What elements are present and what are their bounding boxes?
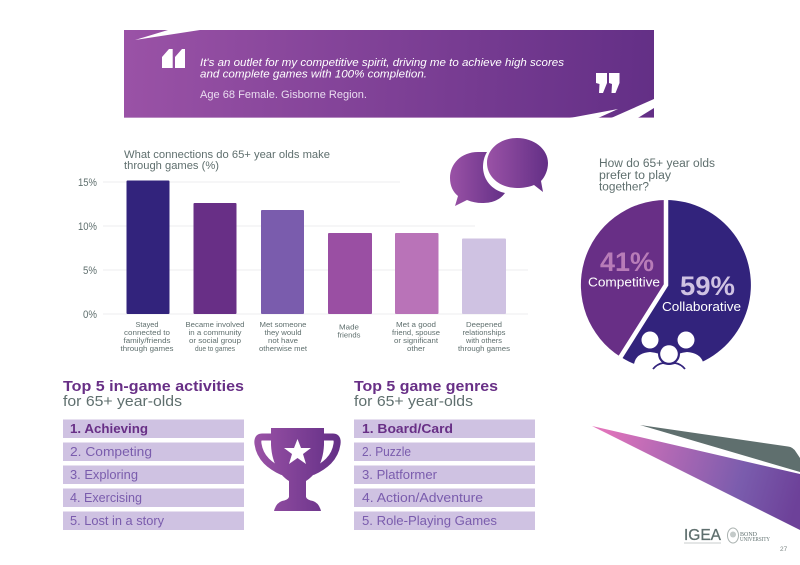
icon: closing quotation mark	[596, 73, 620, 93]
category labels: or social group	[189, 336, 241, 345]
category labels: not have	[268, 336, 298, 345]
category labels: through games	[120, 344, 174, 353]
list: in-game activities	[63, 420, 244, 530]
quote text	[200, 57, 565, 80]
category labels: friend, spouse	[392, 328, 440, 337]
list: game genres: 4. Action/Adventure	[362, 490, 483, 505]
heading: top 5 genres	[354, 378, 498, 410]
category labels: otherwise met	[259, 344, 308, 353]
y axis labels: 5%	[83, 265, 97, 277]
list: game genres: 5. Role-Playing Games	[362, 513, 498, 528]
bars	[126, 180, 506, 314]
category labels: or significant	[394, 336, 439, 345]
category labels: Made	[339, 322, 359, 332]
icon: trophy	[258, 428, 337, 511]
decorative corner swoosh	[592, 425, 800, 530]
heading: top 5 activities: for 65+ year-olds	[63, 393, 182, 410]
page number: 27	[780, 546, 788, 553]
y axis labels	[78, 177, 97, 321]
heading: top 5 genres: for 65+ year-olds	[354, 393, 473, 410]
y axis labels: 0%	[83, 309, 97, 321]
list: in-game activities: 4. Exercising	[70, 490, 142, 505]
category labels: relationships	[462, 328, 506, 337]
slice: collaborative	[620, 200, 751, 370]
pie title	[599, 158, 715, 194]
y axis labels: 15%	[78, 177, 97, 189]
quote text: It's an outlet for my competitive spirit, driving me to achieve high scores	[200, 57, 565, 69]
logo: Bond University: UNIVERSITY	[740, 536, 770, 543]
heading: top 5 activities: Top 5 in-game activities	[63, 378, 244, 395]
icon: opening quotation mark	[162, 49, 185, 68]
category labels: due to games	[195, 344, 235, 353]
list: in-game activities: 2. Competing	[70, 444, 152, 459]
category labels: Stayed	[136, 320, 158, 329]
logo: Bond University: BOND	[740, 531, 757, 538]
list: in-game activities: 1. Achieving	[70, 421, 148, 436]
quote attribution: Age 68 Female. Gisborne Region.	[200, 89, 367, 101]
quote text: and complete games with 100% completion.	[200, 68, 427, 80]
category labels: in a community	[188, 328, 242, 337]
slice: competitive	[581, 200, 666, 357]
logo: IGEA: IGEA	[684, 527, 722, 544]
quote banner	[124, 30, 654, 118]
list: game genres: 2. Puzzle	[362, 444, 411, 459]
label: collaborative: Collaborative	[662, 299, 741, 314]
category labels: connected to	[124, 328, 170, 337]
category labels: Met someone	[260, 320, 306, 329]
list: in-game activities: 5. Lost in a story	[70, 513, 164, 528]
heading: top 5 activities	[63, 378, 244, 410]
list: game genres: 3. Platformer	[362, 467, 438, 482]
bar chart	[78, 177, 528, 353]
icon: group of people	[634, 332, 703, 380]
icon: speech bubbles	[450, 138, 548, 206]
y axis labels: 10%	[78, 221, 97, 233]
category labels: friends	[338, 330, 361, 340]
category labels	[120, 320, 510, 353]
category labels: with others	[465, 336, 502, 345]
pie title: together?	[599, 182, 649, 194]
chart title: What connections do 65+ year olds make	[124, 149, 330, 161]
label: competitive: 41%	[600, 247, 654, 277]
logo: Bond University	[728, 528, 770, 543]
chart title	[124, 149, 330, 172]
category labels: through games	[458, 344, 510, 353]
label: collaborative	[662, 271, 741, 314]
category labels: Deepened	[466, 320, 502, 329]
heading: top 5 genres: Top 5 game genres	[354, 378, 498, 395]
pie title: prefer to play	[599, 170, 671, 182]
category labels: Met a good	[396, 320, 436, 329]
pie title: How do 65+ year olds	[599, 158, 715, 170]
list: in-game activities: 3. Exploring	[70, 467, 138, 482]
chart title: through games (%)	[124, 160, 219, 172]
category labels: they would	[264, 328, 302, 337]
pie chart	[581, 195, 751, 380]
label: collaborative: 59%	[680, 271, 735, 301]
list: game genres	[354, 420, 535, 530]
label: competitive	[588, 247, 660, 290]
label: competitive: Competitive	[588, 274, 660, 290]
category labels: family/friends	[124, 336, 171, 345]
category labels: other	[407, 344, 426, 353]
category labels: Became involved	[186, 320, 244, 329]
list: game genres: 1. Board/Card	[362, 421, 453, 436]
